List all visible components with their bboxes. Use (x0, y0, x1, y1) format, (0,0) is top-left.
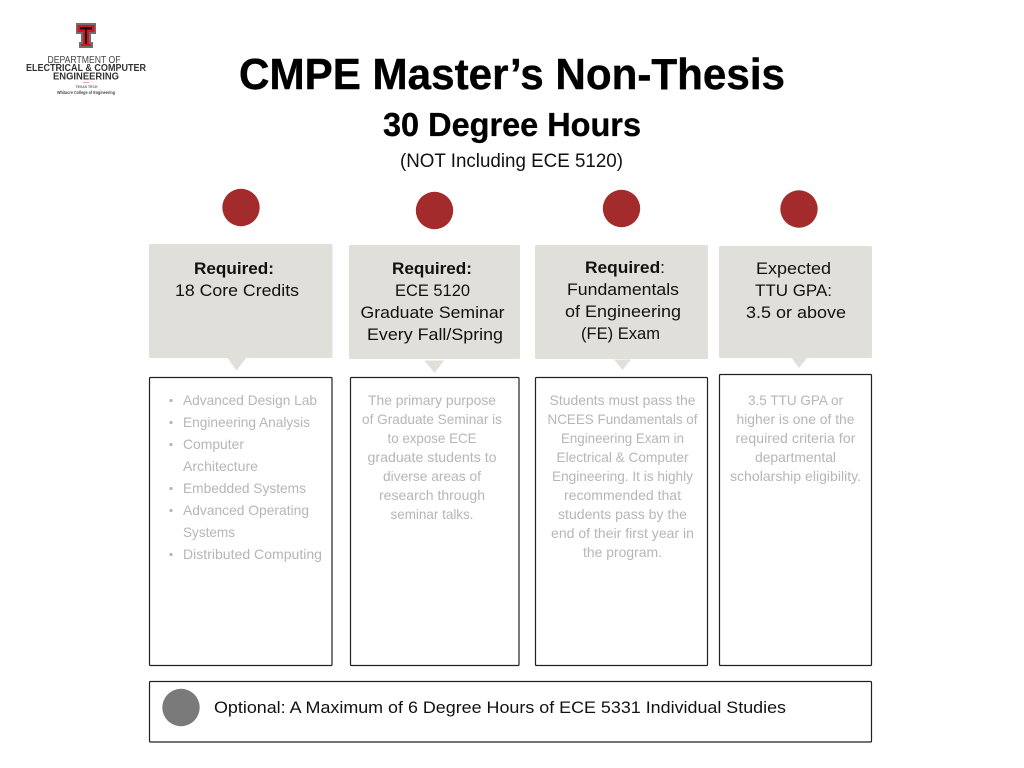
logo: department of electrical and computer engineering: ELECTRICAL & COMPUTER (26, 63, 147, 74)
content box: FE exam description: Engineering. It is highly (552, 468, 693, 484)
content box: seminar description: to expose ECE (388, 430, 476, 446)
content box: GPA description: departmental (755, 449, 836, 465)
heading tag: expected GPA: Expected (756, 260, 831, 278)
panel: FE exam (535, 190, 708, 666)
content box: seminar description: of Graduate Seminar is (362, 411, 502, 427)
logo: department of electrical and computer engineering (26, 23, 147, 95)
content box: seminar description: The primary purpose (368, 392, 496, 408)
heading tag: core credits: 18 Core Credits (175, 282, 299, 300)
content box: seminar description: diverse areas of (383, 468, 481, 484)
content box: FE exam description: Students must pass the (550, 392, 696, 408)
content box: core course list: Engineering Analysis (183, 414, 310, 430)
content box: seminar description: research through (379, 487, 485, 503)
subtitle: degree hours: 30 Degree Hours (383, 106, 641, 143)
content box: GPA description: 3.5 TTU GPA or (748, 392, 843, 408)
content box: GPA description: higher is one of the (736, 411, 855, 427)
content box: core course list: Advanced Operating (183, 502, 309, 518)
content box: core course list (150, 378, 332, 666)
heading tag: FE exam: Fundamentals (567, 281, 679, 299)
content box: seminar description: graduate students to (368, 449, 497, 465)
heading tag: graduate seminar (349, 245, 520, 373)
heading tag: expected GPA: TTU GPA: (755, 282, 832, 300)
content box: FE exam description: students pass by the (558, 506, 687, 522)
content box: core course list: Architecture (183, 458, 258, 474)
logo: department of electrical and computer engineering: TEXAS TECH (76, 84, 98, 89)
heading tag: graduate seminar: Required: (392, 260, 472, 278)
panel: graduate seminar (349, 192, 520, 666)
subtitle note: (NOT Including ECE 5120) (400, 151, 623, 172)
content box: GPA description (720, 374, 872, 666)
heading tag: FE exam: Required: (585, 259, 665, 277)
heading tag: FE exam (535, 245, 708, 370)
icon: double T (76, 23, 96, 48)
content box: core course list: Systems (183, 524, 235, 540)
content box: FE exam description: Engineering Exam in (561, 430, 684, 446)
content box: seminar description: seminar talks. (390, 506, 474, 522)
content box: core course list: Embedded Systems (183, 480, 306, 496)
title: CMPE Master’s Non-Thesis (239, 50, 785, 99)
icon: red dot (780, 190, 818, 228)
content box: FE exam description: NCEES Fundamentals of (548, 411, 698, 427)
content box: core course list: Advanced Design Lab (183, 392, 317, 408)
icon: red dot (222, 189, 260, 226)
content box: GPA description: required criteria for (736, 430, 856, 446)
heading tag: core credits (149, 244, 332, 370)
icon: red dot (416, 192, 453, 229)
content box: FE exam description: recommended that (564, 487, 681, 503)
heading tag: expected GPA: 3.5 or above (746, 304, 846, 322)
logo: department of electrical and computer engineering: Whitacre College of Engineering (57, 90, 115, 95)
heading tag: graduate seminar: Graduate Seminar (360, 304, 505, 322)
heading tag: core credits: Required: (194, 260, 274, 278)
optional text: Optional: A Maximum of 6 Degree Hours of ECE 5331 Individual Studies (214, 699, 786, 717)
content box: FE exam description: the program. (583, 544, 662, 560)
content box: FE exam description: Electrical & Computer (556, 449, 689, 465)
heading tag: FE exam: of Engineering (565, 303, 681, 321)
logo: department of electrical and computer engineering: ENGINEERING (53, 72, 119, 82)
heading tag: expected GPA (719, 246, 872, 368)
panel: expected GPA (719, 190, 872, 666)
content box: FE exam description: end of their first year in (551, 525, 694, 541)
panel: optional individual studies (150, 682, 872, 742)
content box: core course list: Distributed Computing (183, 546, 322, 562)
heading tag: graduate seminar: ECE 5120 (395, 282, 470, 300)
logo: department of electrical and computer engineering: DEPARTMENT OF (48, 55, 120, 66)
icon: grey dot (162, 689, 200, 726)
panel: core credits (149, 189, 332, 666)
icon: red dot (603, 190, 640, 227)
content box: seminar description (350, 378, 519, 666)
heading tag: graduate seminar: Every Fall/Spring (367, 326, 503, 344)
heading tag: FE exam: (FE) Exam (581, 325, 660, 343)
content box: core course list: Computer (183, 436, 244, 452)
content box: GPA description: scholarship eligibility. (730, 468, 861, 484)
content box: FE exam description (536, 378, 708, 666)
